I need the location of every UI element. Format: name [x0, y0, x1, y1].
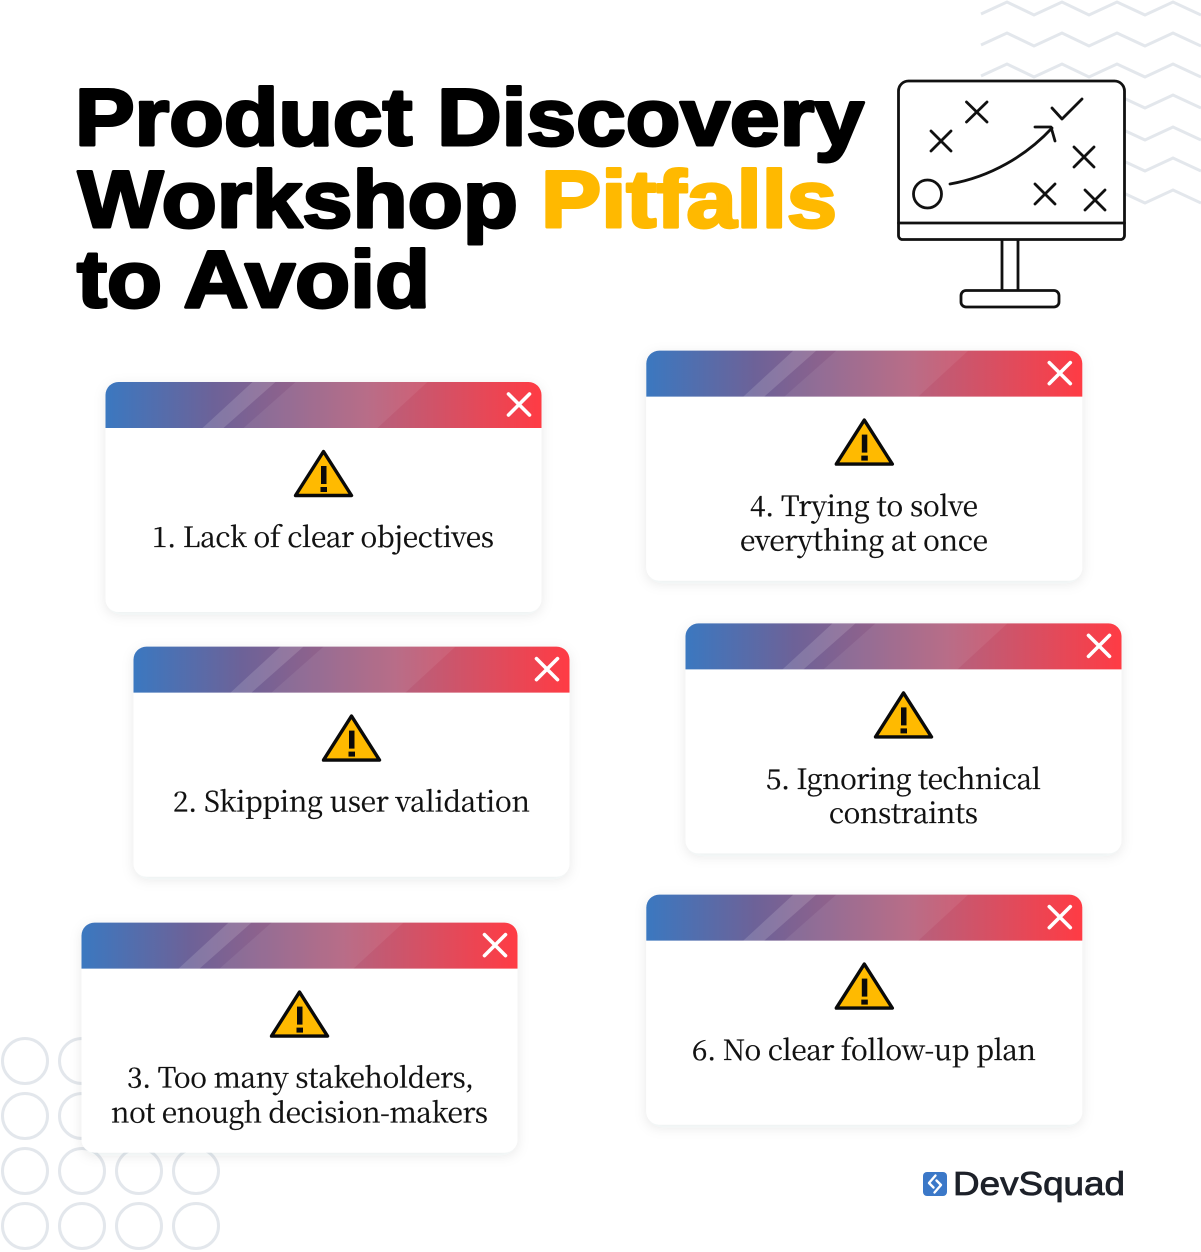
title [75, 73, 864, 325]
title: to Avoid [77, 235, 430, 325]
card 3: too many stakeholders [82, 923, 518, 1153]
icon: monitor with strategy play diagram [898, 81, 1124, 307]
title: Workshop [78, 155, 518, 245]
card 2: skipping user validation: 2. Skipping user validation [173, 781, 530, 821]
card 1: lack of clear objectives: 1. Lack of clear objectives [152, 516, 494, 556]
title: Pitfalls [541, 155, 837, 245]
card 4: trying to solve everything at once [646, 351, 1082, 581]
card 6: no clear follow-up plan [646, 895, 1082, 1125]
card 2: skipping user validation [134, 647, 570, 877]
background pattern: circles [2, 1038, 218, 1248]
card 6: no clear follow-up plan: 6. No clear follow-up plan [692, 1029, 1036, 1069]
card 3: too many stakeholders: 3. Too many stakeholders, [127, 1057, 474, 1097]
card 5: ignoring technical constraints: constraints [829, 792, 978, 832]
title: Product Discovery [75, 73, 864, 163]
card 4: trying to solve everything at once: 4. Trying to solve [750, 485, 978, 525]
card 5: ignoring technical constraints: 5. Ignoring technical [766, 758, 1041, 798]
card 3: too many stakeholders: not enough decision-makers [111, 1091, 488, 1131]
background pattern: chevrons [981, 2, 1201, 203]
card 4: trying to solve everything at once: everything at once [740, 520, 988, 560]
card 5: ignoring technical constraints [686, 623, 1122, 853]
card 1: lack of clear objectives [106, 382, 542, 612]
logo: DevSquad: DevSquad [953, 1165, 1125, 1202]
